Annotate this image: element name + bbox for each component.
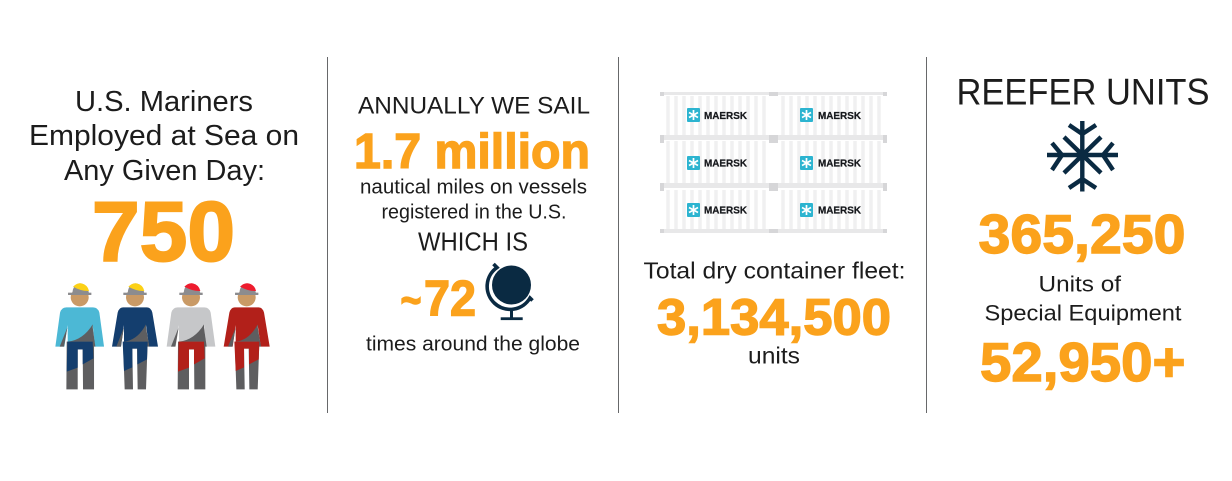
number: 52,950+: 52,950+ (980, 331, 1186, 393)
panel: annual sailing distance (354, 92, 590, 356)
panel: dry container fleet (644, 92, 906, 368)
number: 365,250: 365,250 (978, 203, 1186, 265)
icon: globe (487, 264, 532, 320)
icon: mariner light blue (55, 283, 104, 389)
logo: Maersk container 6 (800, 203, 861, 217)
text: which is: WHICH IS (418, 226, 528, 256)
number: ~72 (400, 270, 476, 326)
panel: mariners (29, 86, 299, 389)
icon: four mariners (55, 283, 270, 389)
text: units: units (748, 342, 800, 368)
number: 3,134,500: 3,134,500 (657, 288, 891, 346)
heading: annually we sail: ANNUALLY WE SAIL (358, 92, 590, 120)
heading: mariners employed (29, 86, 299, 187)
text: units of special equipment (984, 272, 1182, 326)
text: units of special equipment: Special Equipment (984, 300, 1182, 326)
panel: reefer units (956, 72, 1210, 393)
heading: reefer units: REEFER UNITS (956, 72, 1210, 112)
heading: mariners employed: Any Given Day: (64, 155, 265, 187)
logo: Maersk container 5 (687, 203, 747, 217)
text: nautical miles: nautical miles on vessels (360, 176, 587, 198)
logo: Maersk container 4: MAERSK (818, 158, 861, 170)
icon: mariner navy (112, 283, 158, 389)
logo: Maersk container 1: MAERSK (704, 110, 747, 122)
icon: snowflake (1047, 121, 1118, 192)
logo: Maersk container 2 (800, 108, 861, 122)
number: ~72: 72 (424, 270, 476, 326)
logo: Maersk container 6: MAERSK (818, 204, 861, 216)
number: 1.7 million: 1.7 million (354, 125, 590, 179)
text: times around the globe: times around the globe (366, 334, 580, 356)
icon: mariner red (224, 283, 270, 389)
logo: Maersk container 2: MAERSK (818, 110, 861, 122)
logo: Maersk container 3 (687, 156, 747, 170)
number: 750: 750 (92, 184, 235, 278)
heading: mariners employed: Employed at Sea on (29, 120, 299, 152)
icon: mariner grey (167, 283, 215, 389)
text: nautical miles: registered in the U.S. (382, 202, 566, 224)
logo: Maersk container 3: MAERSK (704, 158, 747, 170)
heading: mariners employed: U.S. Mariners (75, 86, 253, 118)
number: ~72: ~ (400, 276, 422, 325)
heading: total dry container fleet: Total dry container fleet: (644, 258, 906, 284)
logo: Maersk container 4 (800, 156, 861, 170)
logo: Maersk container 1 (687, 108, 747, 122)
text: nautical miles (360, 176, 587, 224)
illustration: stacked containers (660, 92, 887, 233)
text: units of special equipment: Units of (1038, 272, 1122, 296)
logo: Maersk container 5: MAERSK (704, 204, 747, 216)
